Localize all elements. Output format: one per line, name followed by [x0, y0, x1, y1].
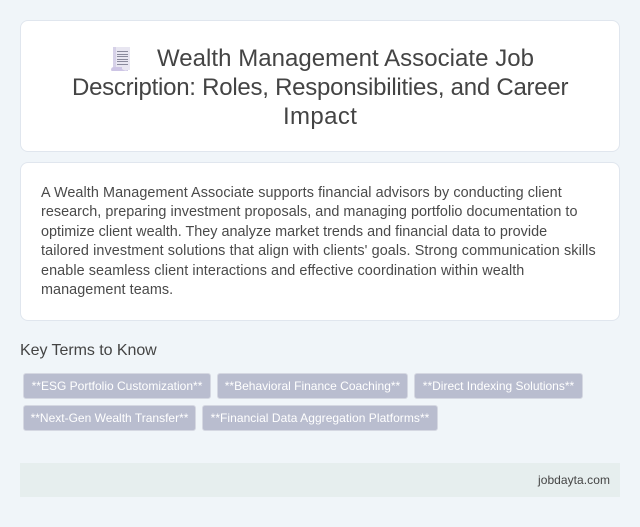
footer bar — [20, 463, 620, 497]
description text: management teams. — [41, 282, 173, 298]
tag: direct indexing: **Direct Indexing Solutions** — [423, 379, 574, 393]
title — [72, 45, 568, 130]
title: Description: Roles, Responsibilities, and Career — [72, 74, 568, 101]
tag: data aggregation: **Financial Data Aggregation Platforms** — [211, 411, 429, 425]
title: Wealth Management Associate Job — [157, 45, 534, 72]
tag: ESG — [23, 373, 211, 399]
description text — [41, 185, 596, 298]
tag: behavioral finance: **Behavioral Finance Coaching** — [225, 379, 400, 393]
footer brand: jobdayta.com — [538, 473, 610, 487]
tag: data aggregation — [202, 405, 438, 431]
description text: enable seamless client interactions and effective coordination within wealth — [41, 263, 524, 279]
description text: tailored investment solutions that align with clients' goals. Strong communication skills — [41, 243, 596, 259]
tag list — [23, 373, 583, 431]
title: Impact — [283, 103, 357, 130]
description text: A Wealth Management Associate supports financial advisors by conducting client — [41, 185, 562, 201]
tag: ESG: **ESG Portfolio Customization** — [32, 379, 202, 393]
panel: title card — [20, 20, 620, 152]
panel: description card — [20, 162, 620, 321]
tag: next-gen — [23, 405, 196, 431]
tag: behavioral finance — [217, 373, 408, 399]
icon: document scroll — [111, 47, 130, 71]
description text: optimize client wealth. They analyze market trends and financial data to provide — [41, 224, 547, 240]
description text: research, preparing investment proposals, and managing portfolio documentation to — [41, 204, 578, 220]
heading: key terms: Key Terms to Know — [20, 342, 157, 359]
tag: next-gen: **Next-Gen Wealth Transfer** — [31, 411, 188, 425]
tag: direct indexing — [414, 373, 583, 399]
